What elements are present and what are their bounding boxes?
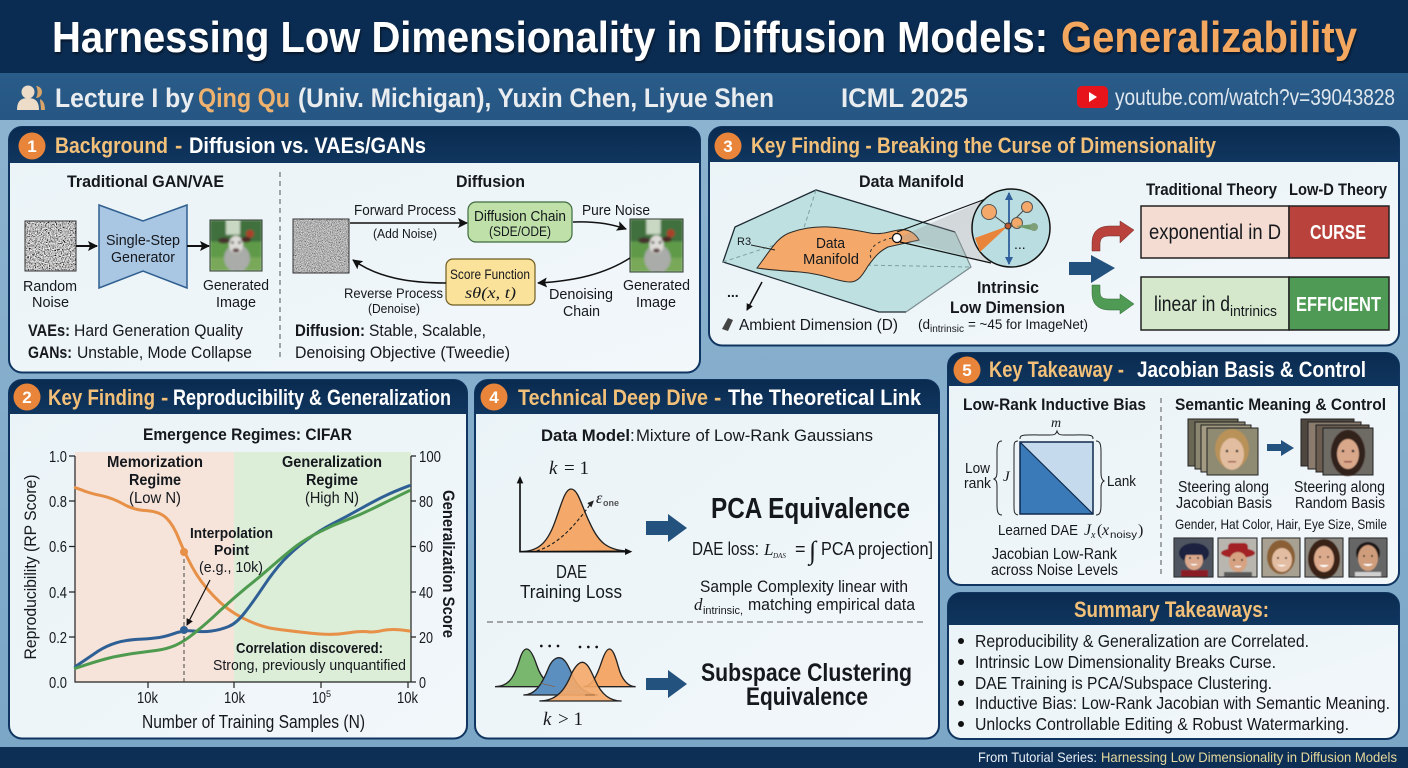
callout: interpolation point: (e.g., 10k): [199, 559, 263, 576]
panel: 1 background: Image: [216, 294, 256, 311]
data model line: :: [630, 426, 635, 445]
axis labels: 0.8: [49, 494, 67, 511]
DAE loss formula: [692, 536, 933, 566]
heading: -: [714, 385, 721, 410]
text: diffusion summary: [295, 322, 510, 362]
regime labels: Regime: [129, 472, 181, 489]
diffusion diagram: sθ(x, t): [465, 285, 516, 302]
panel: 1 background: Noise: [32, 294, 69, 311]
icon: random noise: [25, 221, 76, 271]
learned DAE caption: Jacobian Low-Rank: [992, 546, 1117, 563]
axis labels: [21, 449, 457, 732]
axis labels: 10k: [224, 690, 245, 707]
axis labels: Generalization Score: [439, 490, 457, 638]
caption: DAE training loss: DAE: [556, 562, 587, 582]
subspace clustering heading: Subspace Clustering: [701, 659, 912, 687]
comparison table: linear in d: [1154, 293, 1230, 316]
comparison table: CURSE: [1310, 222, 1366, 244]
jacobian matrix: rank: [964, 475, 991, 492]
DAE loss formula: DAS: [772, 552, 786, 560]
comparison table: exponential in D: [1149, 221, 1281, 244]
diffusion diagram: [293, 202, 690, 320]
diffusion diagram: Generated: [623, 277, 690, 294]
label: k equals 1: [549, 458, 589, 479]
panel: 5 jacobian basis: Low-Rank Inductive Bias: [963, 396, 1146, 414]
learned DAE caption: Learned DAE: [998, 522, 1078, 539]
footer: [0, 747, 1408, 768]
intrinsic dimension label: = ~45 for ImageNet): [968, 317, 1088, 332]
text: VAEs and GANs: Unstable, Mode Collapse: [77, 344, 252, 362]
diffusion diagram: Chain: [563, 303, 600, 320]
diffusion diagram: Diffusion Chain: [474, 209, 566, 225]
diffusion diagram: Score Function: [450, 267, 530, 282]
epsilon label: [596, 490, 619, 508]
text: VAEs and GANs: [28, 322, 252, 362]
arrow: to efficient: [1092, 285, 1134, 314]
panel: 1 background: Random: [23, 278, 77, 295]
panel: summary takeaways: [948, 593, 1399, 739]
arrow: to curse: [1092, 221, 1134, 251]
intrinsic dimension label: intrinsic: [930, 323, 964, 335]
ambient dimension label: Ambient Dimension (D): [739, 317, 898, 334]
sample complexity text: intrinsic,: [703, 605, 743, 617]
DAE loss formula: DAE loss:: [692, 539, 759, 559]
title banner: [0, 0, 1408, 73]
lecture info bar: ICML 2025: [841, 83, 968, 113]
generator block: Single-Step: [106, 232, 180, 249]
ambient dimension label: [722, 282, 898, 334]
heading: Key Takeaway -: [989, 357, 1124, 382]
stack captions: Steering along: [1178, 479, 1269, 496]
face row: [1174, 538, 1387, 579]
heading: [14, 384, 451, 410]
subspace clustering heading: [701, 659, 912, 711]
heading: [954, 356, 1366, 384]
heading: 2: [22, 388, 32, 407]
panel: 4 technical deep dive: [475, 380, 939, 738]
heading: 4: [489, 388, 499, 407]
inset: zoom circle: ...: [1014, 236, 1026, 252]
axis labels: 0: [419, 675, 426, 692]
jacobian matrix: Low: [965, 460, 990, 477]
footer: From Tutorial Series:: [978, 749, 1097, 765]
manifold diagram: R3: [737, 236, 751, 248]
learned DAE caption: (: [1097, 522, 1102, 539]
learned DAE caption: noisy: [1110, 530, 1137, 541]
takeaway list: Intrinsic Low Dimensionality Breaks Curse.: [975, 652, 1276, 672]
sample complexity text: d: [694, 595, 703, 614]
panel: 5 jacobian basis: [948, 353, 1399, 585]
subspace clustering heading: Equivalence: [746, 683, 868, 711]
axis labels: 10k: [137, 690, 158, 707]
sample complexity text: matching empirical data: [748, 595, 916, 614]
intrinsic dimension label: Low Dimension: [950, 298, 1065, 317]
axis labels: Number of Training Samples (N): [142, 712, 365, 732]
arrow: to PCA: [646, 514, 687, 542]
heading: [18, 132, 426, 160]
diffusion diagram: Image: [636, 294, 676, 311]
generator block: [99, 205, 187, 288]
intrinsic dimension label: [918, 278, 1088, 335]
chart: mixture of gaussians: [495, 645, 636, 701]
stack captions: [1176, 479, 1385, 512]
regime labels: [107, 454, 382, 507]
epsilon label: ε: [596, 490, 603, 507]
comparison table: Traditional Theory: [1146, 181, 1278, 199]
title banner: Generalizability: [1061, 13, 1357, 62]
manifold diagram: [723, 190, 991, 312]
inset: zoom circle: [972, 189, 1050, 267]
comparison table: Low-D Theory: [1289, 181, 1388, 199]
heading: Key Finding - Breaking the Curse of Dimensionality: [751, 133, 1217, 158]
heading: Diffusion vs. VAEs/GANs: [189, 133, 426, 158]
lecture info bar: Qing Qu: [198, 83, 290, 113]
jacobian matrix: J: [1003, 469, 1011, 485]
diffusion diagram: (Denoise): [368, 301, 420, 316]
icon: presenters: [17, 86, 45, 110]
panel: 3 curse of dimensionality: [709, 127, 1399, 346]
panel: 2 reproducibility and generalization: Emergence Regimes: CIFAR: [143, 425, 352, 444]
axis labels: 10: [312, 690, 326, 707]
regime labels: Generalization: [282, 454, 382, 471]
lecture info bar: [0, 73, 1408, 120]
stack captions: Jacobian Basis: [1176, 495, 1272, 512]
callout: interpolation point: [190, 525, 273, 576]
callout: interpolation point: Interpolation: [190, 525, 273, 542]
caption: DAE training loss: [520, 562, 622, 602]
diffusion diagram: Denoising: [549, 286, 613, 303]
axis labels: 40: [419, 585, 433, 602]
comparison table: EFFICIENT: [1296, 294, 1381, 316]
comparison table: [1141, 181, 1389, 330]
text: VAEs and GANs: VAEs:: [28, 322, 70, 340]
panel: 5 jacobian basis: Semantic Meaning & Control: [1175, 396, 1386, 414]
heading: The Theoretical Link: [728, 385, 922, 410]
curve: generalization blue: [75, 486, 409, 667]
heading: Technical Deep Dive: [518, 385, 708, 410]
axis labels: 0.0: [49, 675, 67, 692]
panel: 1 background: Traditional GAN/VAE: [67, 172, 224, 191]
text: VAEs and GANs: GANs:: [28, 344, 72, 362]
chart: single gaussian: [517, 476, 632, 555]
heading: [480, 384, 922, 410]
learned DAE caption: J: [1084, 522, 1092, 539]
curve: generalization green: [75, 491, 409, 668]
jacobian matrix: [964, 416, 1136, 515]
diffusion diagram: (SDE/ODE): [489, 223, 551, 239]
icon: youtube: [1077, 86, 1108, 108]
DAE loss formula: =: [795, 539, 806, 559]
axis labels: 0.2: [49, 630, 67, 647]
heading: Key Finding: [48, 385, 155, 410]
callout: correlation: [213, 640, 406, 674]
learned DAE caption: across Noise Levels: [991, 562, 1118, 579]
panel: 4 technical deep dive: PCA Equivalence: [711, 493, 910, 525]
axis labels: 80: [419, 494, 433, 511]
epsilon label: one: [603, 498, 619, 508]
axis labels: Reproducibility (RP Score): [21, 474, 40, 660]
DAE loss formula: L: [763, 540, 773, 559]
stack captions: Random Basis: [1295, 495, 1385, 512]
panel: summary takeaways: Summary Takeaways:: [1074, 597, 1269, 622]
axis labels: 0.4: [49, 585, 67, 602]
heading: -: [161, 385, 168, 410]
heading: Jacobian Basis & Control: [1137, 357, 1366, 382]
heading: Reproducibility & Generalization: [173, 385, 451, 410]
label: k equals 1: = 1: [564, 458, 589, 479]
axis labels: 60: [419, 539, 433, 556]
manifold diagram: Data: [816, 235, 846, 252]
learned DAE caption: x: [1090, 530, 1096, 541]
axis labels: 0.6: [49, 539, 67, 556]
axis labels: 20: [419, 630, 433, 647]
data model line: Data Model: [541, 426, 630, 445]
text: diffusion summary: Diffusion:: [295, 322, 365, 340]
text: diffusion summary: Denoising Objective (Tweedie): [295, 344, 510, 362]
learned DAE caption: ): [1138, 522, 1143, 539]
heading: 5: [962, 361, 972, 380]
sample complexity text: [694, 577, 916, 617]
label: k greater than 1: > 1: [558, 709, 583, 730]
callout: interpolation point: Point: [214, 542, 249, 559]
lecture info bar: Lecture I by: [55, 83, 194, 113]
panel: 3 curse of dimensionality: Data Manifold: [859, 172, 964, 191]
callout: correlation: Strong, previously unquantified: [213, 657, 406, 674]
takeaway list: DAE Training is PCA/Subspace Clustering.: [975, 673, 1272, 693]
stack captions: Steering along: [1294, 479, 1385, 496]
data model line: Mixture of Low-Rank Gaussians: [636, 426, 873, 445]
arrow: steering: [1267, 440, 1294, 456]
DAE loss formula: ∫: [807, 536, 818, 566]
caption: DAE training loss: Training Loss: [520, 582, 622, 602]
heading: Background: [55, 133, 168, 158]
diffusion diagram: (Add Noise): [373, 226, 437, 241]
label: k greater than 1: k: [543, 709, 552, 730]
learned DAE caption: [991, 522, 1143, 579]
regime labels: (High N): [305, 490, 359, 507]
arrow: blue split: [1069, 255, 1115, 283]
axis labels: 10k: [397, 690, 418, 707]
label: k equals 1: k: [549, 458, 558, 479]
heading: 3: [723, 137, 733, 156]
takeaway list: Unlocks Controllable Editing & Robust Watermarking.: [975, 714, 1349, 734]
line chart: [21, 449, 457, 732]
takeaway list: Reproducibility & Generalization are Correlated.: [975, 631, 1309, 651]
diffusion diagram: Forward Process: [354, 203, 456, 219]
ambient dimension label: ...: [727, 284, 739, 300]
axis labels: 1.0: [49, 449, 67, 466]
sample complexity text: Sample Complexity linear with: [700, 577, 908, 596]
heading: 1: [27, 137, 37, 156]
panel: 1 background: Diffusion: [456, 172, 525, 191]
takeaway list: [958, 631, 1390, 734]
axis labels: 100: [419, 449, 441, 466]
heading: -: [175, 133, 182, 158]
panel: 1 background: [9, 127, 700, 372]
regime labels: (Low N): [129, 490, 181, 507]
jacobian matrix: m: [1051, 416, 1061, 431]
generated image: [210, 220, 262, 272]
panel: 1 background: Generated: [203, 277, 269, 294]
jacobian matrix: Lank: [1107, 473, 1136, 490]
curve: reproducibility: [75, 488, 409, 634]
intrinsic dimension label: Intrinsic: [977, 278, 1039, 297]
comparison table: intrinics: [1230, 303, 1277, 320]
DAE loss formula: PCA projection]: [821, 539, 933, 559]
text: VAEs and GANs: Hard Generation Quality: [74, 322, 244, 340]
generator block: Generator: [111, 249, 175, 266]
face stack: jacobian: [1188, 419, 1258, 475]
arrow: to subspace clustering: [646, 670, 687, 698]
text: diffusion summary: Stable, Scalable,: [369, 322, 486, 340]
axis labels: 5: [326, 689, 331, 699]
learned DAE caption: x: [1101, 522, 1109, 539]
intrinsic dimension label: (d: [918, 317, 930, 332]
panel: 2 reproducibility and generalization: [9, 380, 467, 738]
lecture info bar: (Univ. Michigan), Yuxin Chen, Liyue Shen: [298, 83, 774, 113]
manifold diagram: Manifold: [803, 251, 859, 268]
diffusion diagram: Reverse Process: [344, 285, 443, 301]
title banner: Harnessing Low Dimensionality in Diffusion Models:: [52, 13, 1048, 62]
diffusion diagram: Pure Noise: [582, 203, 650, 219]
face stack: random: [1301, 419, 1373, 476]
regime labels: Memorization: [107, 454, 203, 471]
callout: correlation: Correlation discovered:: [236, 640, 383, 657]
label: k greater than 1: [543, 709, 583, 730]
regime labels: Regime: [306, 472, 358, 489]
